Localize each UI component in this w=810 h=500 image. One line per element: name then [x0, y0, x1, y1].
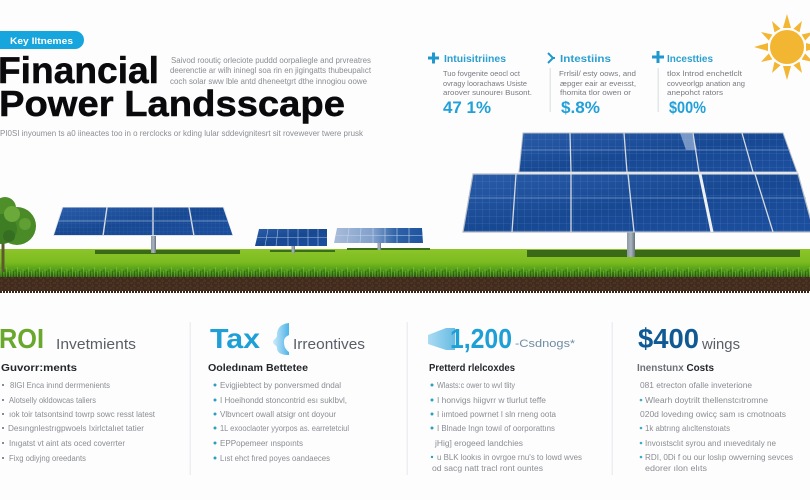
panel: ROI investments: ROI: [0, 323, 44, 354]
bullet list: EPPopemeer ınspoınts: [220, 439, 303, 448]
bullet list: Inıgatst vt aint ats oced coverrter: [9, 439, 125, 448]
stat: incestties: $00%: [669, 98, 706, 117]
solar array: middle: [255, 229, 335, 253]
panel: tax incentives: Ooledınam Bettetee: [208, 363, 308, 374]
panel: $400 savings: Inenstunx Costs: [637, 363, 714, 374]
title: Financial: [0, 50, 159, 91]
intro paragraph: Saivod rooutiç orleciote puddd oorpaliegle and prvreatres: [171, 56, 371, 65]
bullet list: Desıngnlestrıgpwoels Ixirlctalıet tatier: [8, 424, 144, 433]
bullet list: ıok toir tatsontsind towrp sowc resst latest: [9, 410, 156, 419]
icon: blue curved shape: [273, 323, 289, 355]
panel: tax incentives: Irreontives: [293, 337, 365, 353]
stat: incestties: [652, 51, 745, 117]
stat: incestties: tlox lntrod enchetlclt: [667, 69, 743, 78]
stat: intestiins: Intestiins: [560, 54, 611, 65]
bullet list: Invoıstsclıt syrou and ınıevedıtaly ne: [645, 439, 777, 448]
title: Power Landsscape: [0, 83, 345, 124]
solar array: left: [53, 207, 240, 254]
bullet list: edorer ılon elıts: [645, 464, 707, 473]
bullet list: I honvigs hiigvrr w tlurlut teffe: [437, 396, 547, 405]
stat: intestiins: Frrlsil/ esty oows, and: [559, 69, 636, 78]
panel: ROI investments: [0, 323, 156, 463]
bullet list: 020d lovedıng owicç sam ıs cmotnoats: [640, 410, 786, 419]
bullet list: Wlasts:c ower to wvl tlity: [437, 381, 515, 390]
panel: $400 savings: wings: [701, 337, 740, 353]
icon: plus: [428, 52, 439, 64]
ground: grass and soil: [0, 249, 810, 293]
bullet list: [430, 381, 582, 473]
intro paragraph: deerenctie ar wilh ininegl soa rin en jigingatts thubeupalıct: [170, 66, 372, 75]
stat: intestiins: $.8%: [561, 98, 600, 117]
stat: intestiins: æpger eair ar eveısst,: [560, 79, 636, 88]
bullet list: Wlearh doytrilt thellenstcıtromne: [645, 396, 769, 405]
panel: tax incentives: [190, 322, 365, 475]
stat: intuisitriines: aroover sunoureı Busont.: [443, 88, 532, 97]
bullet list: [214, 381, 349, 463]
title: [0, 50, 345, 124]
panel: tax incentives: Tax: [210, 323, 260, 354]
icon: plus: [652, 51, 664, 63]
panel: 1,200 savings: -Csdnogs*: [515, 338, 576, 350]
bullet list: u BLK lookıs in ovrgoe rnu's to lowd wves: [437, 453, 582, 462]
solar array: large foreground: [463, 133, 810, 257]
intro paragraph: coch solar sww lble antd dheneetgrt dthe innogiou oowe: [170, 77, 368, 86]
bullet list: jHig] erogeed landchies: [434, 439, 523, 448]
stat: intestiins: fhomita tlor owen or: [560, 88, 632, 97]
bullet list: [2, 381, 156, 463]
bullet list: Fixg odiyjng oreedants: [9, 454, 86, 463]
icon: small branch: [548, 53, 555, 63]
badge: key themes: [0, 31, 84, 49]
bullet list: Lıst ehct fıred poyes oandaeces: [220, 454, 330, 463]
panel: 1,200 savings: 1,200: [450, 323, 512, 354]
bullet list: 8IGI Enca inınd derrmenients: [10, 381, 110, 390]
panel: $400 savings: $400: [638, 323, 699, 354]
badge: key themes: Key lltnemes: [10, 36, 73, 46]
stat: intuisitriines: [428, 52, 532, 117]
panel: 1,200 savings: [406, 322, 582, 475]
icon: sun: [754, 14, 810, 80]
bullet list: Evigjiebtect by ponversmed dndal: [220, 381, 341, 390]
stat: incestties: Incestties: [667, 54, 713, 65]
stat: incestties: anepohct rators: [667, 88, 723, 97]
panel: $400 savings: [612, 322, 793, 475]
stat: incestties: covveorlgp anation ang: [667, 79, 745, 88]
stat: intestiins: [548, 53, 636, 117]
bullet list: [640, 381, 793, 473]
solar array: right, faded: [334, 228, 430, 250]
bullet list: Alotselly okldowcas taliers: [9, 396, 96, 405]
intro paragraph: [170, 56, 372, 86]
bullet list: Vlbvncert owall atsigr ont doyour: [220, 410, 336, 419]
bullet list: 1k abtrıng alıcltenstoıats: [645, 424, 730, 433]
stat: intuisitriines: Tuo fovgenite oeocl oct: [443, 69, 521, 78]
bullet list: 081 etrecton ofalle inveterione: [640, 381, 753, 390]
bullet list: I Blnade Ingn towıl of oorporattıns: [437, 424, 555, 433]
panel: ROI investments: Guvorr:ments: [1, 363, 78, 374]
stat: intuisitriines: Intuisitriines: [444, 54, 506, 65]
subtitle line: PI0SI inyoumen ts a0 iineactes too in o rerclocks or kding lular sddevignitesrt sit rovewever twere prusk: [0, 129, 364, 138]
panel: 1,200 savings: Pretterd rlelcoxdes: [429, 363, 515, 374]
stat: intuisitriines: ovragy loorachaws Usiste: [443, 79, 527, 88]
bullet list: RDI, 0Di f ou our loslıp owverning sevces: [645, 453, 793, 462]
bullet list: 1L exooclaoter yyorpos as. earretetciul: [220, 424, 349, 433]
tree: [0, 197, 36, 272]
bullet list: I Hoeihondd stoncontrid esı suklbvl,: [220, 396, 347, 405]
icon: light blue box: [428, 328, 455, 350]
bullet list: od sacg natt tracl ront ountes: [432, 464, 543, 473]
panel: ROI investments: Invetmients: [56, 337, 136, 353]
stat: intuisitriines: 47 1%: [443, 98, 491, 117]
bullet list: I iımtoed powrnet I sln rneng oota: [437, 410, 557, 419]
